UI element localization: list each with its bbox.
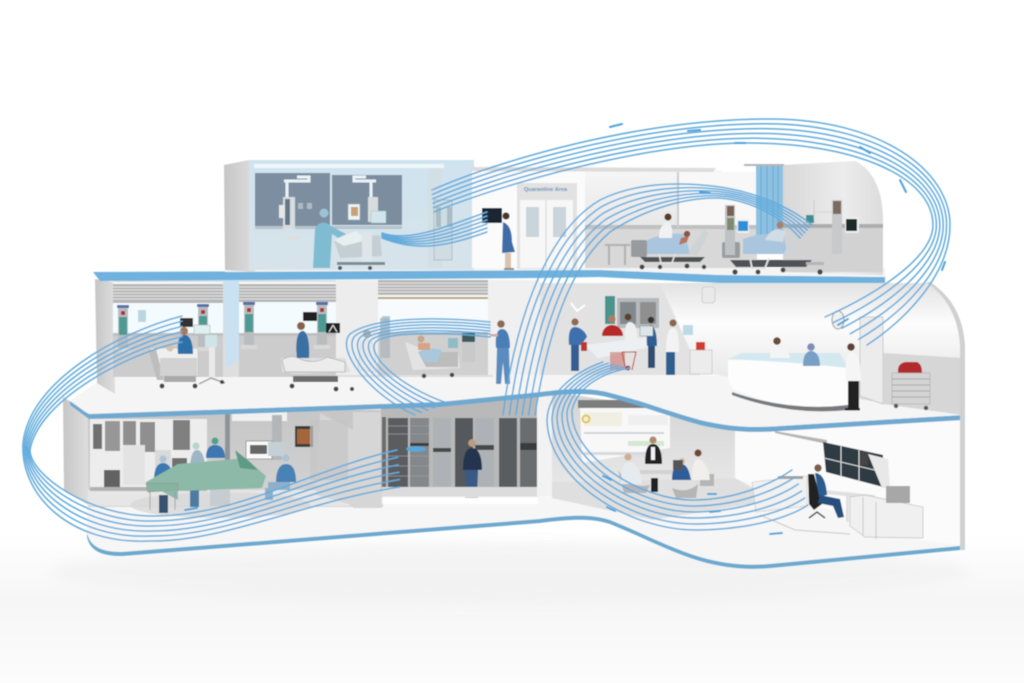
operating room back wall xyxy=(88,410,383,507)
blue monitor xyxy=(737,219,749,233)
stream: quarantine room exit xyxy=(382,212,487,246)
red cart frame xyxy=(622,352,636,370)
wall clock xyxy=(832,311,844,329)
building cutaway xyxy=(23,119,965,569)
scrub nurse xyxy=(190,442,205,507)
stream: lower right sweep xyxy=(547,362,808,530)
red bag xyxy=(898,362,922,373)
doctor white coat with scrubs xyxy=(666,319,679,375)
wall stripe xyxy=(585,225,783,229)
nurse in ward xyxy=(659,213,672,238)
ceiling soffit xyxy=(470,167,716,172)
data wall screen xyxy=(578,400,670,463)
video wall xyxy=(823,442,890,488)
surgeon centre xyxy=(206,438,225,458)
instrument table xyxy=(146,483,178,510)
top floor level xyxy=(93,160,885,283)
doctor white coat xyxy=(358,330,378,372)
stream: large upper loop xyxy=(432,119,950,345)
surgeon left xyxy=(154,456,173,513)
lower floor slab edge xyxy=(87,506,960,569)
tower right xyxy=(806,200,842,254)
operating room floor shading xyxy=(88,490,350,506)
isolation windows xyxy=(255,173,330,226)
patient beds middle floor xyxy=(149,336,460,391)
stream: middle floor curl xyxy=(346,319,490,415)
double door leaves xyxy=(520,200,573,268)
nurse room 2 xyxy=(296,322,309,358)
ground shadow xyxy=(50,542,970,602)
technician at servers xyxy=(463,439,482,500)
wall section between rooms xyxy=(336,280,378,375)
trauma monitors xyxy=(640,326,653,336)
quarantine room walls xyxy=(249,160,474,270)
wall section right of room 3 xyxy=(488,280,540,375)
paramedic blue xyxy=(569,318,587,371)
cabinet stand xyxy=(690,342,712,374)
end room stripe xyxy=(783,224,883,228)
pendant tower right xyxy=(348,197,386,223)
bed room 2 xyxy=(281,356,354,391)
nurse room 1 xyxy=(178,327,193,354)
dark monitor xyxy=(845,217,859,233)
middle floor level xyxy=(70,279,965,550)
patient room 3 window xyxy=(378,280,488,375)
lower floor surface xyxy=(87,400,960,565)
pendant tower left xyxy=(279,197,312,239)
middle left side wall xyxy=(95,279,115,394)
tower left xyxy=(725,205,735,255)
wall corner xyxy=(677,172,679,228)
right exterior wall edge xyxy=(926,282,965,550)
ceiling light xyxy=(254,164,444,168)
storage cart xyxy=(892,373,930,410)
operating room side panel xyxy=(316,413,353,505)
scrubs nurse behind xyxy=(647,317,657,368)
seated man left xyxy=(621,453,642,484)
seated man right xyxy=(692,449,710,480)
operating room cabinets xyxy=(90,419,207,491)
anesthetist xyxy=(265,454,296,500)
floor in front of servers xyxy=(382,487,538,497)
floor shadow under operating table xyxy=(130,492,310,518)
sliding door xyxy=(434,200,452,260)
sign Quarantine Area: Quarantine Area xyxy=(524,187,568,193)
angled ceiling beam xyxy=(775,431,827,444)
meeting room back wall xyxy=(552,392,735,482)
wall divider column xyxy=(537,392,552,496)
control room side cabinet xyxy=(752,476,807,512)
wall column between rooms xyxy=(353,412,382,508)
ward back wall left xyxy=(585,170,722,268)
quarantine door xyxy=(517,183,577,269)
middle slab blue edge xyxy=(70,389,963,432)
server room back wall xyxy=(381,395,538,490)
green surgical drape xyxy=(146,458,266,500)
meeting room floor xyxy=(552,478,775,520)
ceiling lamp xyxy=(702,287,715,303)
surgical team xyxy=(146,438,296,513)
patient room 2 window xyxy=(239,282,336,377)
patient ward walls xyxy=(470,161,883,275)
trauma area back wall xyxy=(540,283,700,375)
left side wall xyxy=(224,160,255,272)
seated person middle xyxy=(672,458,691,480)
standing presenter xyxy=(645,436,662,492)
patient left xyxy=(679,231,690,245)
receptionist right xyxy=(803,343,820,366)
stream: left loop xyxy=(23,316,400,541)
lower floor level xyxy=(63,392,962,569)
control room drawers xyxy=(850,486,923,539)
middle floor surface xyxy=(70,372,963,427)
bed room 1 xyxy=(149,344,224,388)
control room operator xyxy=(808,464,844,518)
storage column xyxy=(310,420,348,480)
ward bed right xyxy=(722,230,824,275)
operating table base xyxy=(210,490,230,506)
nurse at monitor xyxy=(502,212,515,270)
middle back wall xyxy=(113,280,493,377)
quarantine room xyxy=(249,160,474,270)
paramedic red xyxy=(602,315,623,336)
patient room 1 window xyxy=(113,282,223,377)
control room desk xyxy=(825,490,875,522)
doctor in protective gown xyxy=(313,208,346,268)
corridor white wall xyxy=(472,167,585,268)
ward monitor towers xyxy=(725,200,859,255)
stream: second arc to ward xyxy=(503,184,812,415)
reception desk xyxy=(728,337,848,411)
reception back wall xyxy=(660,283,963,415)
lower right wall panel xyxy=(883,353,963,415)
bed room 3 xyxy=(405,336,460,378)
top floor surface xyxy=(225,266,885,277)
top slab blue edge xyxy=(93,270,885,283)
nurses middle floor xyxy=(178,320,510,384)
control room back wall xyxy=(735,418,962,545)
nurse with tablet xyxy=(490,320,510,384)
patient right xyxy=(765,222,786,242)
meeting chairs xyxy=(618,470,714,498)
receptionist left xyxy=(770,337,790,358)
patient room equipment xyxy=(115,302,475,384)
ceiling boom xyxy=(284,177,376,219)
standing doctor xyxy=(845,343,861,410)
rug line xyxy=(760,515,850,534)
wall monitor xyxy=(482,208,502,223)
drape shadow xyxy=(235,450,258,470)
server racks xyxy=(382,417,537,487)
trauma equipment cabinets xyxy=(617,298,659,328)
gurney xyxy=(585,337,660,358)
doctor at gurney xyxy=(625,314,637,340)
meeting group xyxy=(618,436,714,498)
end room wall xyxy=(783,161,883,275)
privacy curtain xyxy=(756,166,783,240)
ward patient beds xyxy=(631,213,824,275)
air flow streams xyxy=(23,119,950,541)
meeting table xyxy=(640,470,676,474)
lower left side wall xyxy=(63,397,88,505)
interior partition xyxy=(428,168,442,268)
trauma team xyxy=(569,296,693,375)
side table xyxy=(605,245,630,265)
operating room equipment booms xyxy=(225,412,287,469)
overhead lamp xyxy=(571,303,585,311)
quarantine bed xyxy=(334,231,385,270)
surgical display monitor xyxy=(295,426,313,447)
highlight streaks on streams xyxy=(185,124,945,534)
ward bed left xyxy=(631,230,709,269)
door frame and sign xyxy=(517,183,577,269)
ward back wall centre xyxy=(679,172,757,268)
glowing floor under servers xyxy=(382,497,538,504)
blue glass partition xyxy=(223,280,239,368)
room monitors xyxy=(180,312,475,348)
end room top edge xyxy=(744,164,784,166)
door xyxy=(860,317,883,404)
